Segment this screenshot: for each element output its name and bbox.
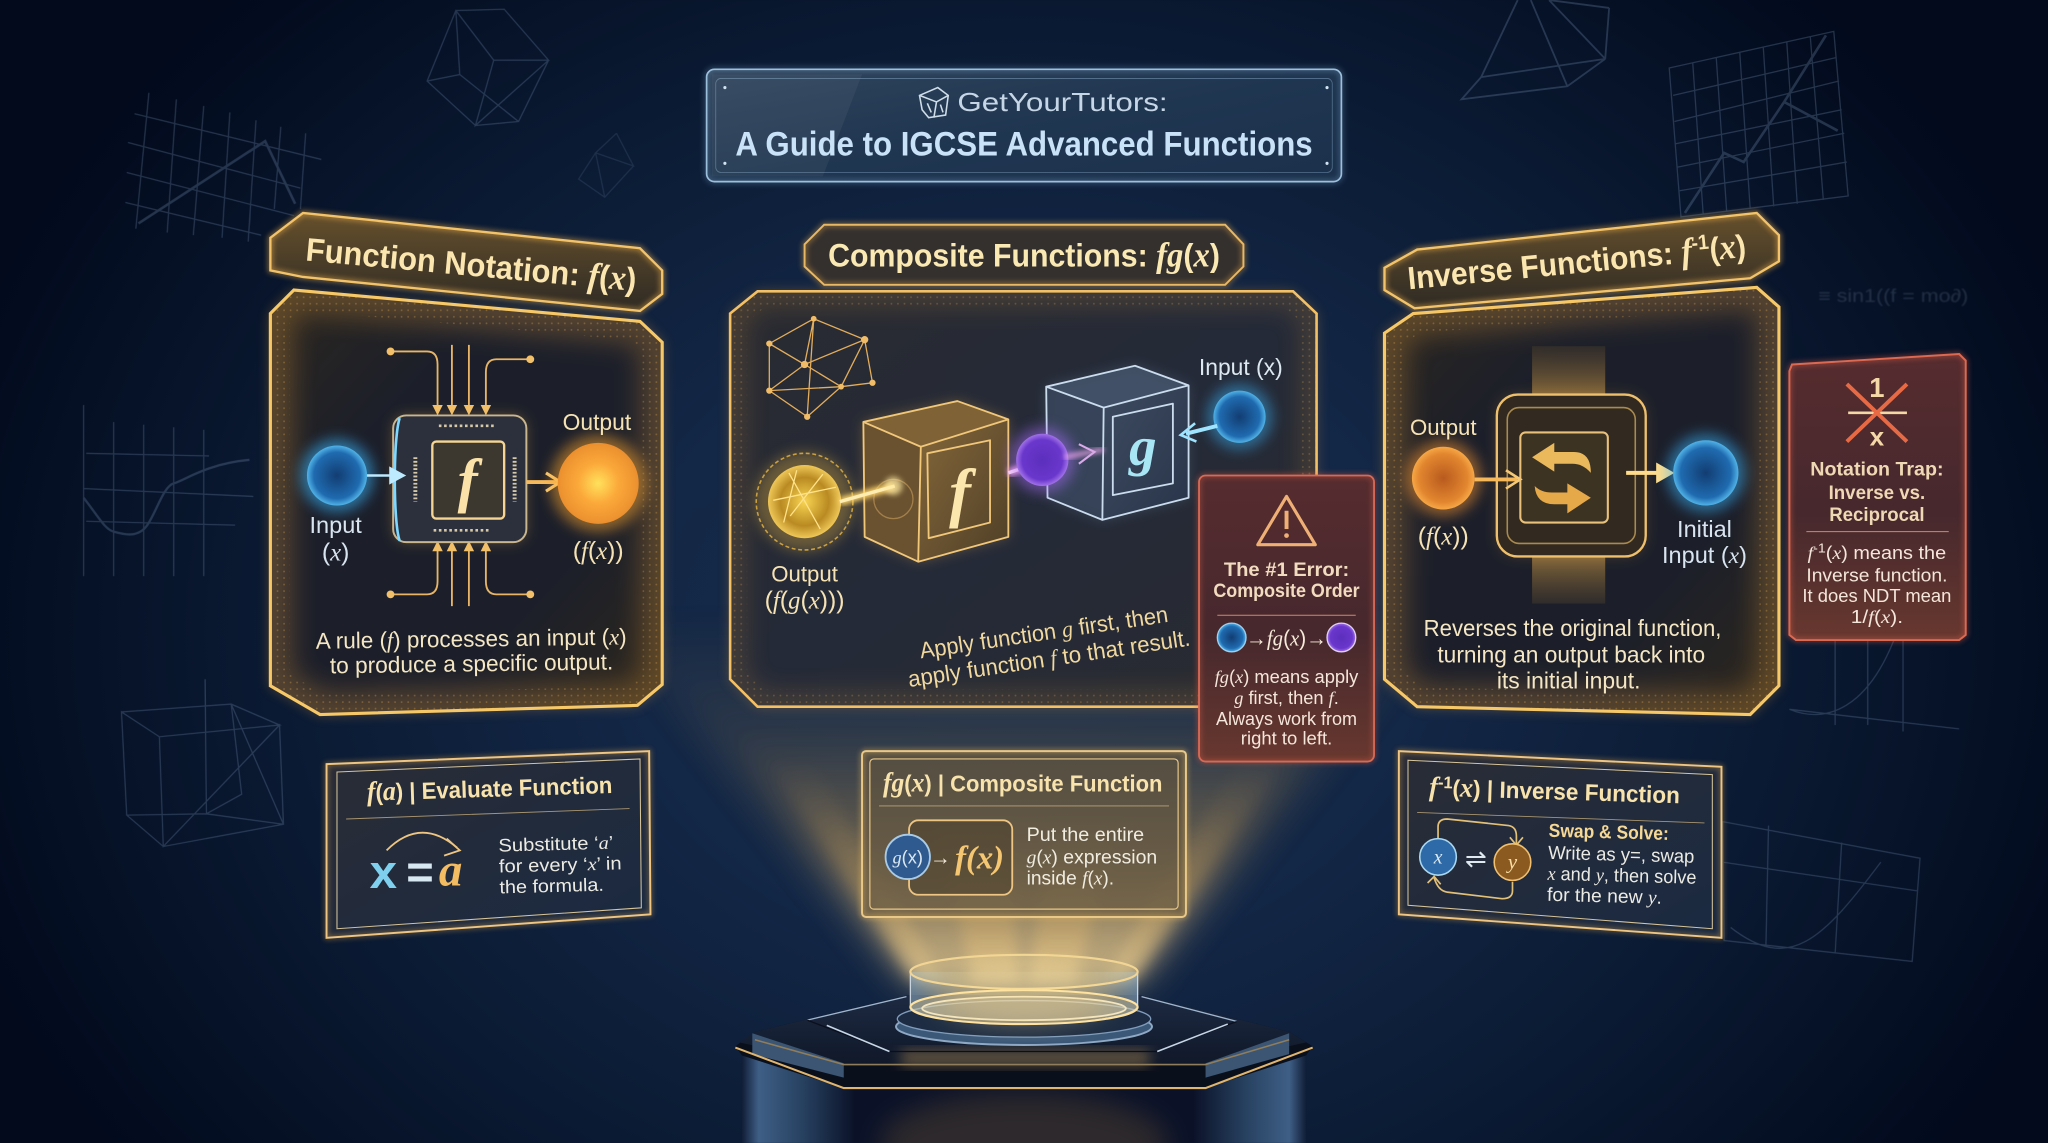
icon: function chip: f: [458, 446, 483, 513]
projector light beams: [598, 614, 1450, 982]
label: output: Output: [771, 561, 838, 586]
arrow: input to chip: [367, 466, 406, 485]
icon: warning triangle: [1258, 496, 1315, 545]
brand line: GetYourTutors:: [957, 87, 1168, 117]
callout body: It does NDT mean: [1802, 585, 1951, 606]
callout heading: Inverse vs.: [1829, 482, 1925, 504]
callout body: [1215, 666, 1359, 749]
card heading: (: [1452, 775, 1461, 801]
label: output: Output: [1410, 415, 1477, 440]
callout heading: [1810, 458, 1944, 526]
icon: f cube: [863, 401, 1008, 562]
icon: crossed reciprocal: [1847, 372, 1907, 451]
callout body: [1802, 541, 1951, 627]
background wireframes: math shapes and graphs: [84, 0, 1968, 961]
heading: inverse functions: (: [1708, 230, 1721, 267]
icon: initial input sphere: [1667, 434, 1745, 512]
heading: inverse functions: Inverse Functions: f: [1406, 231, 1695, 296]
callout body: Always work from: [1216, 708, 1357, 729]
wireframe cube lower left: [121, 679, 283, 846]
description: inverse: turning an output back into: [1437, 641, 1705, 667]
heading: inverse functions: x): [1717, 227, 1748, 267]
arrow: intermediate to g: [1064, 444, 1104, 464]
icon: f cube: f: [949, 458, 977, 530]
heading: composite functions: Composite Functions: fg(x): [828, 236, 1220, 275]
arrow: chip to output: [526, 473, 560, 491]
card: inverse function: [1399, 751, 1721, 938]
order diagram: →fg(x)→: [1246, 625, 1327, 650]
callout body: fg(x) means apply: [1215, 666, 1359, 687]
panel: function notation: [270, 213, 662, 715]
callout body: 1/f(x).: [1851, 606, 1903, 627]
wireframe grid chart top left: [125, 93, 321, 242]
description: composite: Apply function g first, then: [918, 601, 1170, 663]
icon: swap device: [1497, 346, 1646, 604]
icon: crossed reciprocal: 1: [1869, 372, 1885, 403]
arrow: f to output: [840, 477, 903, 502]
panel: composite functions: [730, 225, 1317, 707]
card text: for every ‘ x’ in: [499, 852, 622, 877]
heading: inverse functions: [1384, 213, 1779, 308]
arrow: purple to f: [1008, 460, 1048, 473]
card text: Substitute ‘ a’: [498, 832, 613, 856]
card: composite function: [862, 751, 1186, 917]
card text: x and y, then solve: [1546, 864, 1697, 889]
description: function notation: A rule (f) processes an input (x): [316, 623, 627, 654]
card heading: f: [1429, 771, 1441, 802]
diagram: swap x and y: [1420, 819, 1531, 899]
heading: composite functions: [805, 225, 1243, 285]
card text: the formula.: [499, 874, 604, 897]
wireframe grid chart top right: [1669, 31, 1848, 217]
formula: x equals a: a: [439, 845, 462, 897]
card text: [498, 831, 622, 897]
heading: inverse functions: -1: [1690, 231, 1710, 255]
callout body: right to left.: [1241, 728, 1332, 749]
wireframe chart right: [1789, 627, 1959, 732]
main title: A Guide to IGCSE Advanced Functions: [735, 125, 1313, 164]
callout body: f: [1808, 543, 1816, 563]
card text: Swap & Solve:: [1548, 821, 1669, 845]
icon: g cube: [1046, 366, 1189, 520]
label: f of x: (f(x)): [573, 538, 624, 565]
wireframe small prism: [579, 133, 633, 197]
callout body: x) means the: [1832, 542, 1938, 563]
diagram: swap x and y: ⇌: [1465, 843, 1487, 873]
card text: inside f(x).: [1027, 868, 1114, 889]
wireframe cube top: [427, 9, 549, 125]
label: input: Input: [310, 512, 362, 538]
card text: for the new y.: [1547, 885, 1662, 909]
card heading: -1: [1438, 773, 1453, 792]
callout body: -1: [1813, 541, 1826, 556]
description: inverse: Reverses the original function,: [1424, 615, 1721, 641]
heading: function notation: Function Notation: f(x): [304, 229, 638, 299]
diagram: g inside f: [886, 820, 1012, 895]
background formula text: ≡ sin1((f = mo∂): [1818, 285, 1968, 306]
callout body: g first, then f.: [1234, 687, 1339, 708]
diagram: g inside f: →: [930, 847, 951, 870]
callout heading: Reciprocal: [1829, 504, 1925, 526]
card text: [1546, 821, 1698, 910]
label: input x: Input (x): [1199, 354, 1283, 380]
description: function notation: to produce a specific output.: [330, 648, 613, 678]
arrow: device to input: [1626, 462, 1674, 483]
label: output: Output: [563, 409, 632, 435]
card: evaluate function: [327, 751, 650, 938]
label: input x: Input (x): [1662, 542, 1747, 569]
order diagram: [1217, 615, 1356, 652]
diagram: swap x and y: y: [1506, 850, 1518, 874]
wireframe graph lower right: [1723, 822, 1920, 961]
callout: composite order error: [1199, 476, 1374, 762]
pedestal: [735, 955, 1313, 1143]
glass emitter: [896, 955, 1152, 1045]
arrow: input to g: [1181, 423, 1217, 442]
label: f of x: (f(x)): [1418, 524, 1469, 551]
callout body: (: [1826, 542, 1832, 563]
formula: x equals a: x: [370, 845, 397, 898]
panel: inverse functions: [1384, 213, 1779, 715]
description: inverse: [1424, 615, 1721, 693]
card text: [1027, 825, 1157, 889]
diagram: circuit wires: [387, 345, 534, 606]
icon: input sphere: [1207, 384, 1272, 449]
icon: output sphere: [550, 435, 647, 532]
icon: output sphere: [1405, 440, 1481, 516]
heading: function notation: [270, 213, 662, 311]
callout: notation trap: [1789, 354, 1966, 640]
icon: wire mesh polyhedron: [766, 316, 876, 420]
icon: output sphere: [755, 452, 854, 551]
icon: g cube: g: [1127, 416, 1157, 477]
diagram: swap x and y: x: [1433, 847, 1443, 868]
pedestal body: [742, 1055, 1306, 1143]
label: f g x: (f(g(x))): [765, 588, 845, 615]
card text: g(x) expression: [1027, 847, 1157, 868]
callout heading: Composite Order: [1213, 581, 1360, 602]
diagram: g inside f: f(x): [955, 841, 1004, 877]
wireframe chart left: [84, 405, 253, 576]
icon: function chip: [393, 415, 526, 542]
wireframe pyramid top right: [1462, 0, 1609, 99]
formula: x equals a: [370, 833, 462, 898]
callout body: Inverse function.: [1806, 564, 1947, 585]
arrow: output to device: [1475, 470, 1520, 489]
callout heading: [1213, 560, 1360, 602]
description: function notation: [316, 623, 627, 679]
formula: x equals a: =: [406, 845, 434, 898]
card heading: fg(x) | Composite Function: [883, 768, 1162, 798]
card text: Put the entire: [1027, 825, 1144, 846]
description: inverse: its initial input.: [1497, 667, 1640, 693]
card heading: x) | Inverse Function: [1460, 772, 1689, 809]
icon: crossed reciprocal: x: [1870, 421, 1885, 451]
callout heading: The #1 Error:: [1224, 560, 1349, 581]
pedestal top: [735, 995, 1313, 1088]
card heading: f(a) | Evaluate Function: [366, 769, 613, 807]
card text: Write as y=, swap: [1548, 843, 1695, 868]
title banner: [707, 69, 1341, 182]
icon: logo cube: [920, 88, 948, 118]
label: input x: (x): [322, 539, 349, 566]
icon: input sphere: [300, 439, 374, 512]
diagram: g inside f: g(x): [893, 846, 923, 867]
description: composite: apply function f to that result.: [906, 625, 1192, 692]
label: initial: Initial: [1677, 516, 1732, 542]
icon: intermediate sphere: [1010, 427, 1075, 492]
callout heading: Notation Trap:: [1810, 458, 1944, 480]
